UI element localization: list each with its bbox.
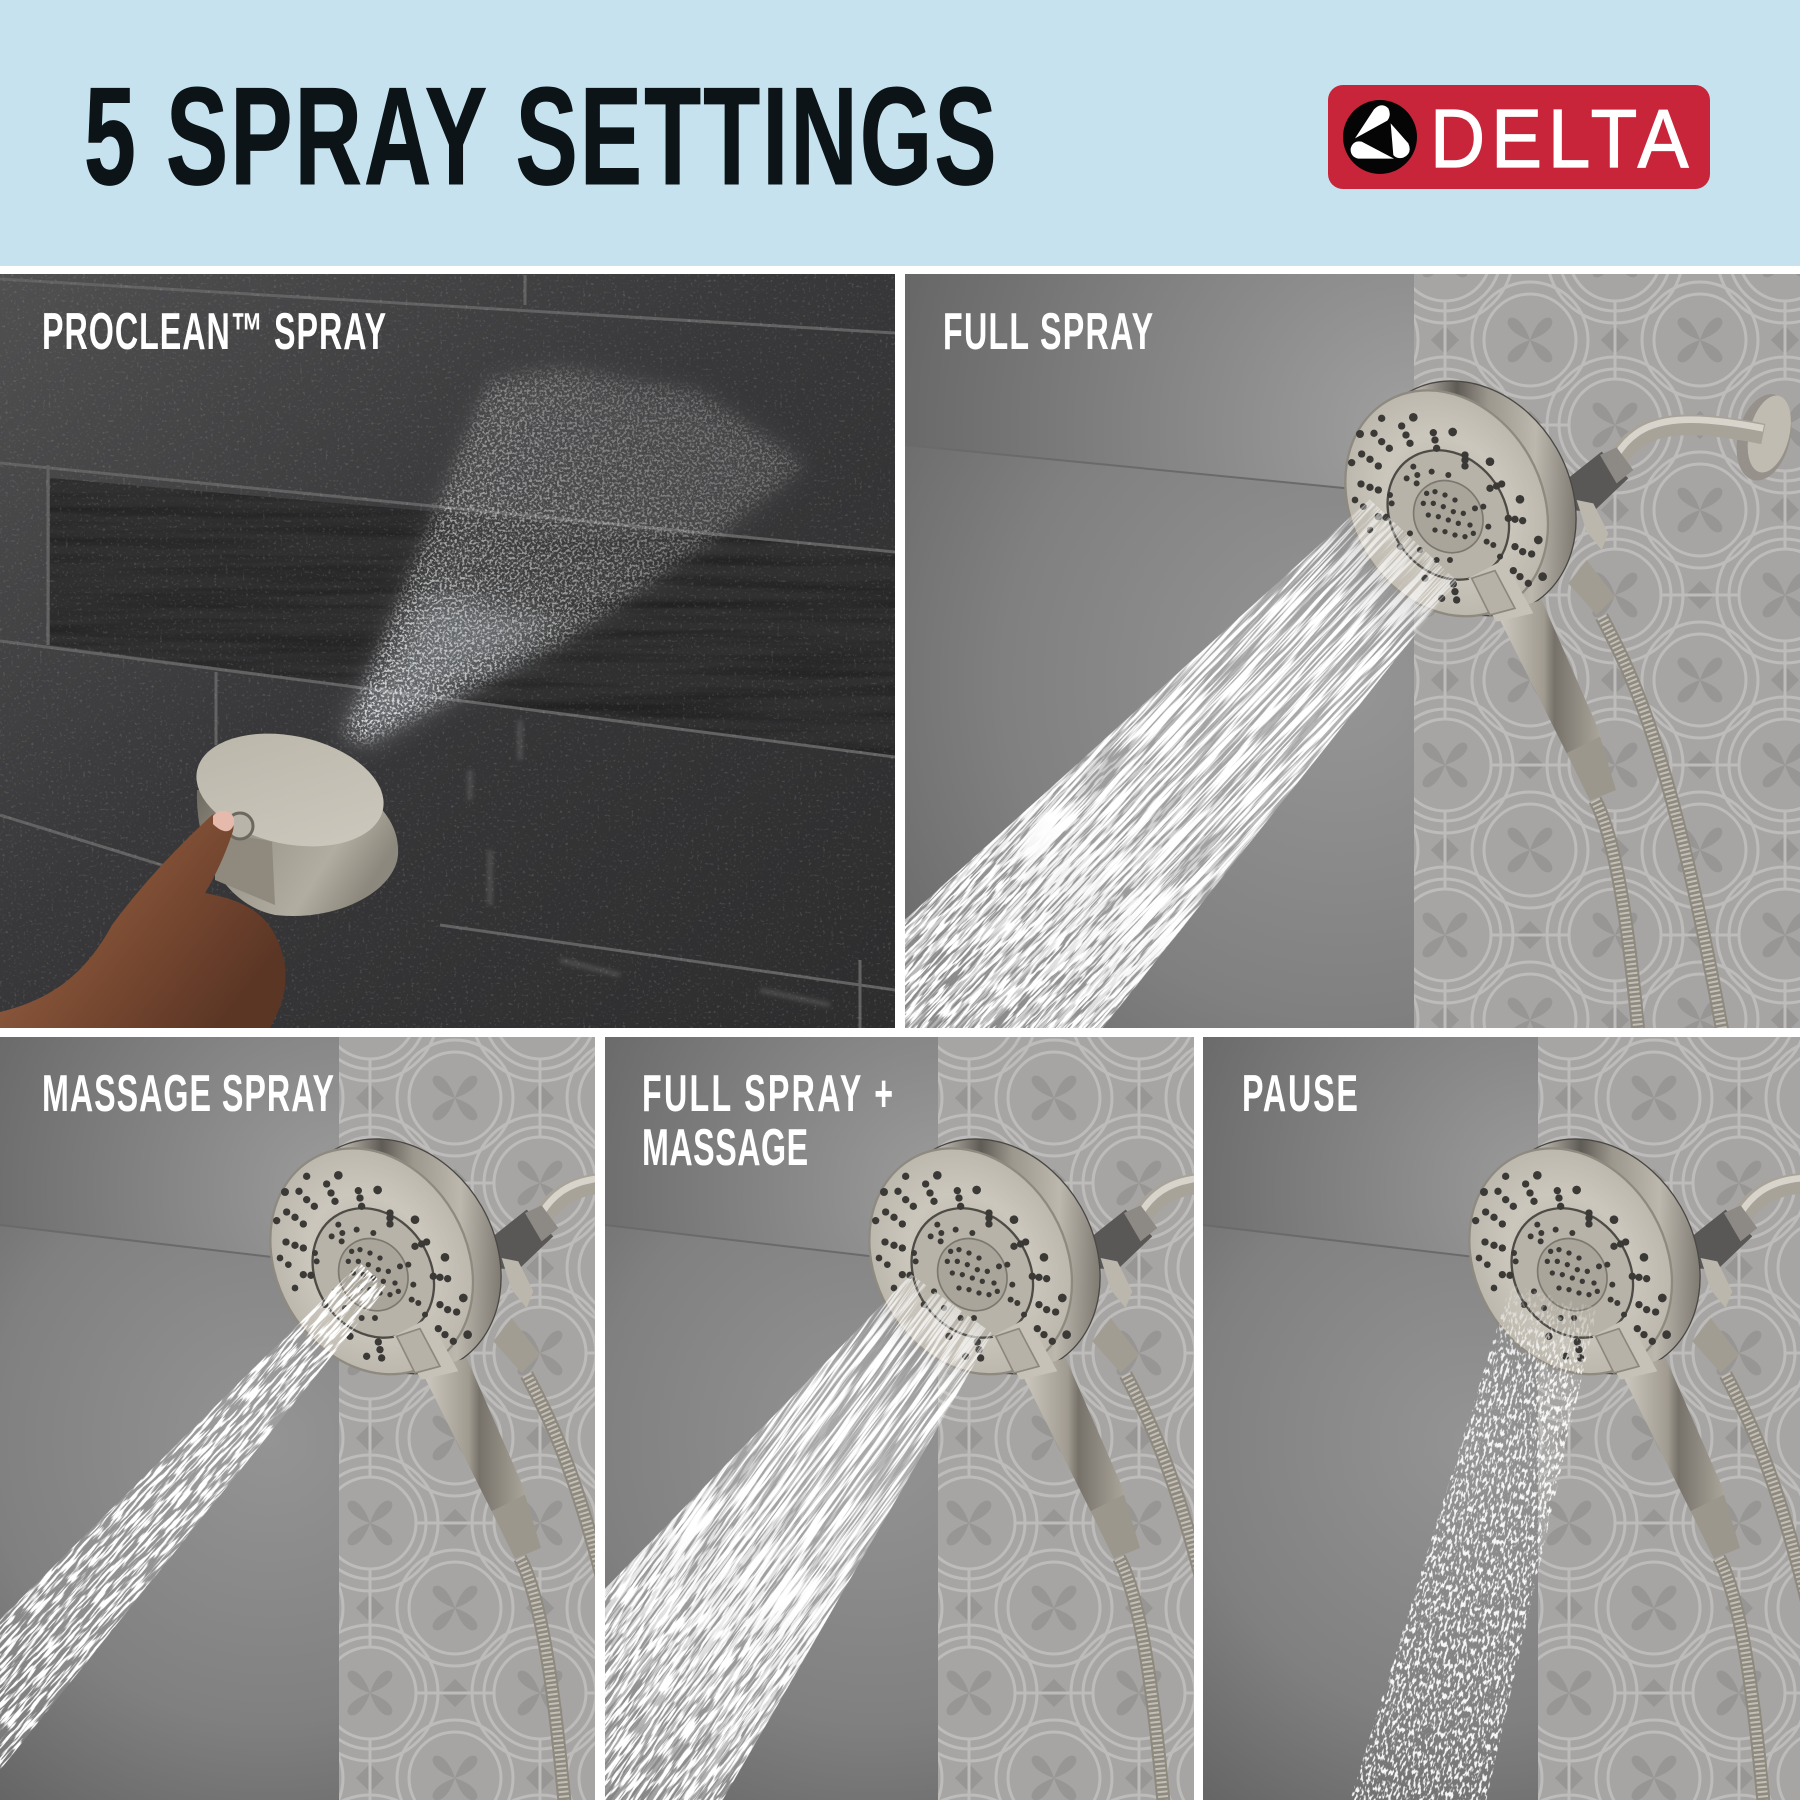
title: 5 SPRAY SETTINGS	[84, 59, 997, 215]
hand	[0, 811, 286, 1028]
panel: full spray	[905, 274, 1800, 1028]
panel: massage spray	[0, 1037, 595, 1800]
logo: Delta	[1328, 85, 1710, 189]
shower head puck	[196, 734, 398, 916]
water mist	[345, 368, 805, 742]
logo wordmark: DELTA	[1430, 92, 1689, 185]
label: MASSAGE	[642, 1119, 808, 1177]
panel: pause	[1203, 1032, 1800, 1800]
label	[644, 1074, 892, 1166]
label: PAUSE	[1242, 1065, 1358, 1123]
panel: full spray + massage	[605, 1037, 1194, 1800]
water spray	[605, 1274, 992, 1800]
icon: Delta triangle mark	[1343, 100, 1417, 174]
shower head	[829, 1100, 1324, 1800]
water spray	[0, 1264, 386, 1770]
water spray	[905, 500, 1458, 1028]
label: PROCLEAN™ SPRAY	[42, 303, 386, 361]
label: FULL SPRAY +	[642, 1065, 893, 1123]
water spray	[1338, 1279, 1620, 1800]
shower head	[230, 1100, 725, 1800]
shower head	[1429, 1100, 1800, 1800]
shower head	[1305, 342, 1800, 1127]
panel: ProClean spray	[0, 274, 895, 1028]
label: MASSAGE SPRAY	[42, 1065, 334, 1123]
label: FULL SPRAY	[943, 303, 1153, 361]
header band	[0, 0, 1800, 266]
